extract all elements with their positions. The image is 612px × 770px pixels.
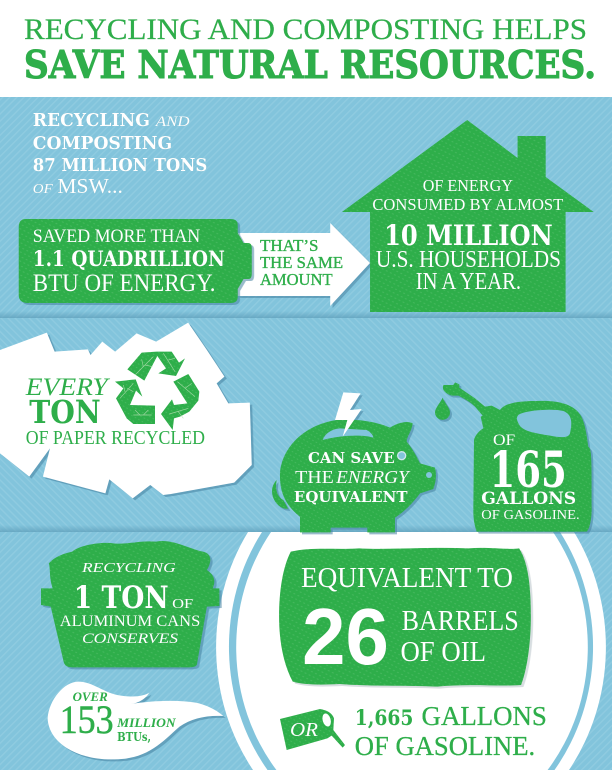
house text: OF ENERGY <box>423 177 513 196</box>
bin text <box>60 560 200 647</box>
gas can text: OR <box>290 719 318 741</box>
jug text: OF <box>493 430 516 449</box>
piggy text <box>294 449 411 506</box>
piggy text: THE <box>295 468 334 488</box>
battery text: 1.1 QUADRILLION <box>33 248 225 272</box>
gallons text: OF GASOLINE. <box>355 732 535 761</box>
gallons text: GALLONS <box>422 702 547 731</box>
piggy text: CAN SAVE <box>308 449 395 467</box>
title: RECYCLING AND COMPOSTING HELPS <box>24 13 587 46</box>
bin text: CONSERVES <box>82 631 178 647</box>
battery text: BTU OF ENERGY. <box>33 269 215 297</box>
intro text: RECYCLING <box>33 110 150 131</box>
barrel text: 26 <box>302 592 389 681</box>
house text: IN A YEAR. <box>416 268 521 295</box>
paper text: OF PAPER RECYCLED <box>26 427 205 449</box>
paper text <box>25 373 205 449</box>
barrel text <box>301 562 519 681</box>
bubble text: BTUs, <box>117 731 151 745</box>
intro text <box>33 110 207 198</box>
piggy text: ENERGY <box>335 468 411 488</box>
jug text <box>481 430 580 523</box>
gallons text <box>355 702 547 761</box>
intro text: OF <box>33 181 53 197</box>
bubble text: OVER <box>73 690 108 705</box>
panel: aluminum background <box>0 532 612 770</box>
barrel text: BARRELS <box>402 605 519 636</box>
icon: house <box>342 120 594 312</box>
intro text: MSW... <box>57 175 123 198</box>
jug text: 165 <box>489 440 567 499</box>
icon: piggy bank <box>272 392 436 532</box>
jug text: GALLONS <box>481 489 576 509</box>
panel: paper background <box>0 318 612 532</box>
icon: battery <box>19 219 252 303</box>
intro text: 87 MILLION TONS <box>33 155 207 176</box>
icon: gas can <box>280 709 345 750</box>
house text <box>372 177 563 295</box>
bin text: ALUMINUM CANS <box>60 612 200 630</box>
gallons text: 1,665 <box>355 707 413 731</box>
piggy text: EQUIVALENT <box>294 488 408 506</box>
circle panel: barrels <box>216 532 606 770</box>
panel: energy saved background <box>0 97 612 318</box>
jug text: OF GASOLINE. <box>481 507 580 523</box>
house text: CONSUMED BY ALMOST <box>372 196 563 215</box>
barrel text: EQUIVALENT TO <box>301 562 513 593</box>
icon: gasoline jug <box>435 382 592 532</box>
arrow text: AMOUNT <box>260 271 333 290</box>
icon: aluminum can bin <box>41 541 219 667</box>
bubble text: MILLION <box>116 716 176 731</box>
barrel text: OF OIL <box>400 636 486 667</box>
house text: 10 MILLION <box>384 219 553 252</box>
icon: gas cloud bubble <box>48 682 223 759</box>
paper pile <box>0 323 252 498</box>
icon: recycling symbol <box>115 352 199 430</box>
bin text: OF <box>172 596 193 612</box>
bin text: RECYCLING <box>81 560 176 576</box>
arrow text: THAT’S <box>260 237 319 256</box>
bin text: 1 TON <box>74 579 169 615</box>
title <box>24 13 596 87</box>
bubble text: 153 <box>60 698 114 742</box>
arrow text: THE SAME <box>260 254 343 273</box>
icon: oil barrel <box>279 548 531 687</box>
battery text: SAVED MORE THAN <box>33 226 200 247</box>
intro text: COMPOSTING <box>33 133 172 154</box>
arrow: that's the same amount <box>238 223 370 306</box>
bubble text <box>60 690 176 745</box>
paper text: TON <box>29 394 101 431</box>
battery text <box>33 226 225 297</box>
arrow text <box>260 237 343 290</box>
paper text: EVERY <box>25 373 111 401</box>
intro text: AND <box>155 112 190 130</box>
